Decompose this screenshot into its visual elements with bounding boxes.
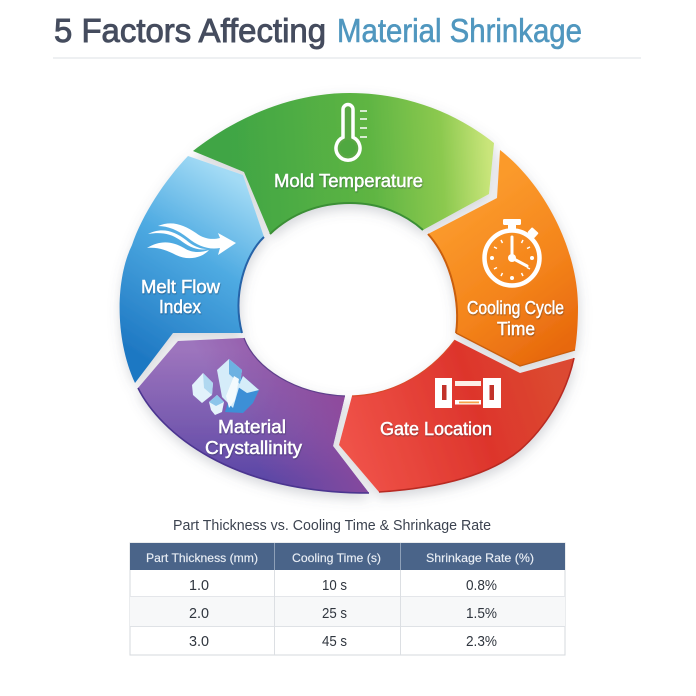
row: 1.0 mm: 10 s: [322, 577, 347, 594]
icon: gate: [435, 378, 501, 408]
row: 2.0 mm: [189, 605, 497, 622]
table title: Part Thickness vs. Cooling Time & Shrinkage Rate: [173, 517, 491, 534]
icon: flow arrow: [147, 223, 236, 258]
row: 3.0 mm: 45 s: [322, 633, 347, 650]
label: material crystallinity: [205, 417, 302, 458]
label: gate location: Gate Location: [380, 419, 492, 439]
table header: Cooling Time (s): [292, 551, 381, 565]
table header: Shrinkage Rate (%): [426, 551, 534, 565]
label: cooling cycle time: Time: [497, 319, 535, 339]
label: material crystallinity: Material: [218, 417, 286, 437]
row: 1.0 mm: 1.0: [189, 577, 209, 594]
row: 1.0 mm: [189, 577, 497, 594]
row: 3.0 mm: 2.3%: [466, 633, 497, 650]
icon: stopwatch: [484, 219, 540, 286]
table header: [130, 543, 565, 570]
table header: Part Thickness (mm): [146, 551, 258, 565]
label: mold temperature: Mold Temperature: [274, 171, 423, 191]
cycle wheel: [120, 93, 578, 493]
title: [54, 12, 582, 49]
segment: melt flow index: [120, 156, 264, 383]
row: 3.0 mm: [189, 633, 497, 650]
title: 5 Factors Affecting: [54, 12, 326, 49]
segment: material crystallinity: [138, 338, 369, 493]
row: 3.0 mm: 3.0: [189, 633, 209, 650]
icon: thermometer: [336, 104, 367, 160]
segment: gate location: [339, 340, 574, 492]
label: cooling cycle time: Cooling Cycle: [467, 298, 564, 318]
label: melt flow index: [141, 277, 221, 317]
data table: [130, 543, 565, 655]
row: 2.0 mm: 1.5%: [466, 605, 497, 622]
row: 2.0 mm: 25 s: [322, 605, 347, 622]
row: 1.0 mm: 0.8%: [466, 577, 497, 594]
row: 2.0 mm: 2.0: [189, 605, 209, 622]
title: Material Shrinkage: [337, 12, 582, 49]
label: melt flow index: Index: [159, 297, 201, 317]
label: melt flow index: Melt Flow: [141, 277, 221, 297]
label: material crystallinity: Crystallinity: [205, 438, 302, 458]
segment: cooling cycle time: [428, 150, 578, 366]
label: cooling cycle time: [467, 298, 564, 339]
segment: mold temperature: [193, 93, 494, 234]
icon: crystals: [192, 359, 259, 415]
